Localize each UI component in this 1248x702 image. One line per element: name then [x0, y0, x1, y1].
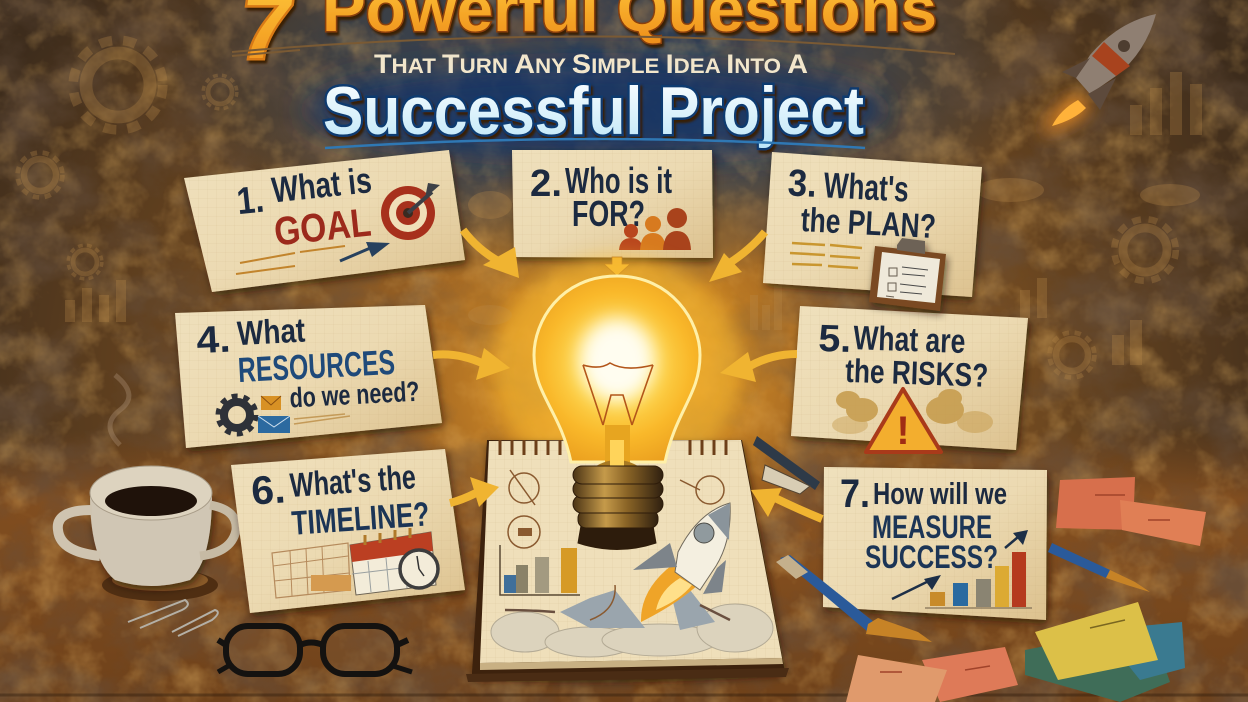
question 6 text [250, 457, 431, 546]
question 5 text [817, 318, 990, 394]
panel: question 3 [763, 152, 982, 297]
panel: question 1 [184, 150, 465, 292]
icon: rocket, top right [1040, 14, 1156, 135]
question 2 text: Who is it [565, 160, 672, 201]
icon: glasses [218, 626, 412, 674]
bulb base [573, 466, 663, 550]
question 4 text [195, 306, 420, 418]
arrow 2 to bulb [604, 257, 630, 276]
question 1 text [234, 159, 378, 258]
icon: three people [619, 208, 691, 250]
question 6 text: TIMELINE? [290, 495, 431, 543]
arrow 3 to bulb [709, 232, 765, 282]
question 5 text: the RISKS? [845, 352, 989, 394]
rocks [832, 389, 993, 434]
question 4 text: What [236, 312, 306, 353]
icon: warning triangle [866, 389, 941, 453]
arrow 7 to notebook [751, 488, 822, 519]
icon: calendar grid sketch [272, 543, 351, 598]
question 7 text: SUCCESS? [865, 539, 998, 575]
panel: question 5 [791, 306, 1028, 453]
question 1 text: What is [270, 159, 373, 210]
icon: clipboard on question 3 [869, 238, 946, 311]
question 2 text [530, 160, 672, 234]
question 1 text: 1. [235, 179, 266, 223]
icon: rising arrow and lines [236, 242, 390, 274]
plan lines [790, 243, 862, 268]
icon: gear [218, 396, 256, 434]
sketch: clouds [491, 590, 773, 657]
sketch: bar chart [500, 545, 580, 595]
question 5 text: 5. [818, 318, 852, 361]
panel: question 4 [175, 305, 442, 448]
sticky notes bottom [846, 647, 1018, 702]
icon: pen across desk [776, 555, 932, 642]
heading underline [325, 139, 865, 148]
icon: coffee cup [58, 375, 236, 601]
question 2 text: 2. [530, 163, 562, 205]
icon: paper clips [128, 600, 218, 636]
question 3 text: the PLAN? [800, 201, 937, 246]
panel: question 7 [823, 467, 1047, 620]
question 2 text: FOR? [572, 193, 645, 234]
question 7 text: 7. [840, 472, 870, 516]
question 7 text: How will we [873, 476, 1007, 511]
icon: light bulb [534, 276, 700, 550]
panel: notebook [466, 440, 789, 682]
sketch: circles and arrows [505, 470, 730, 620]
title underline swoosh [232, 36, 955, 56]
subtitle: THAT TURN ANY SIMPLE IDEA INTO A [374, 49, 808, 79]
panel: question 6 [231, 449, 465, 613]
icon: calendar [350, 528, 436, 595]
question 4 text: RESOURCES [237, 343, 396, 390]
icon: pen on right [1048, 543, 1150, 592]
light bulb glow [492, 255, 742, 485]
question 7 text: MEASURE [872, 509, 992, 545]
question 1 text: GOAL [272, 201, 373, 254]
question 6 text: 6. [250, 467, 287, 514]
decorative wall sketches: gears and charts [18, 40, 1202, 377]
question 6 text: What's the [289, 458, 417, 505]
icon: envelopes [258, 396, 350, 433]
heading: Successful Project: Successful Project [323, 73, 864, 149]
question 4 text: 4. [195, 319, 232, 362]
question 3 text [785, 162, 939, 246]
sketch: rocket [633, 503, 730, 622]
notebook spiral [500, 440, 726, 455]
question 4 text: do we need? [289, 376, 420, 413]
icon: fountain pen, top [753, 436, 820, 494]
arrow 5 to bulb [720, 352, 797, 382]
arrow 6 to notebook [450, 477, 499, 507]
icon: success bar chart [892, 530, 1032, 608]
icon: warning triangle: ! [896, 409, 910, 453]
question 7 text [840, 472, 1007, 575]
icon: clock [400, 550, 438, 588]
question 3 text: 3. [787, 162, 818, 206]
panel: question 2 [512, 150, 713, 258]
icon: target with dart [381, 183, 440, 240]
arrow 1 to bulb [463, 230, 519, 278]
arrow 4 to bulb [433, 348, 510, 380]
sticky notes right [1056, 477, 1206, 546]
question 3 text: What's [823, 164, 910, 210]
title: 7 Powerful Questions [233, 0, 937, 78]
question 5 text: What are [853, 319, 966, 361]
sticky note stack [1025, 602, 1185, 702]
